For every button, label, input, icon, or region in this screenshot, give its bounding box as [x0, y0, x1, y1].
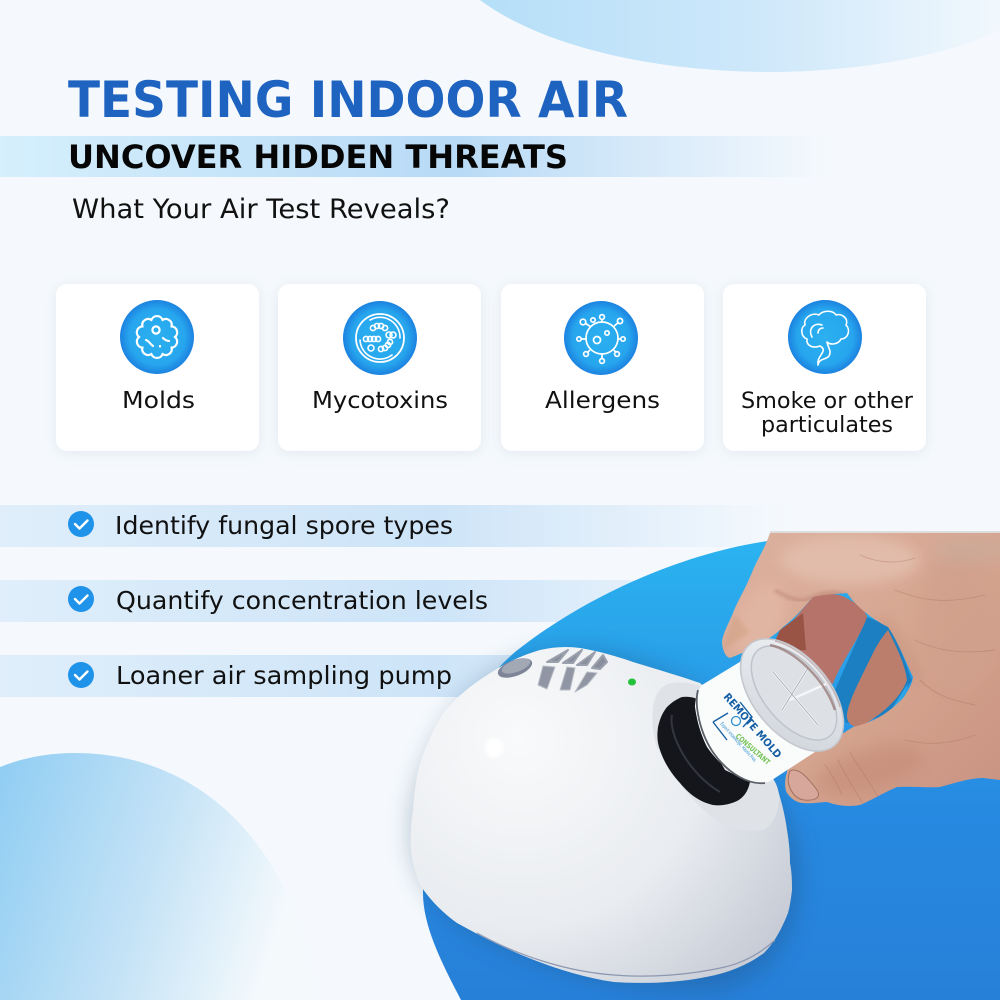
list item: spore types: Identify fungal spore types — [115, 511, 453, 540]
pump: lens bevel — [652, 683, 779, 831]
pump: green LED — [628, 678, 636, 686]
list item: spore types — [0, 505, 790, 547]
icon: petri dish — [343, 301, 417, 375]
cassette: logo: REMOTE MOLD — [721, 691, 784, 761]
list item: concentration: Quantify concentration levels — [116, 586, 488, 615]
photo: hand holding cassette over pump — [410, 531, 1000, 990]
icon: mold spore — [120, 300, 194, 374]
panel: mycotoxins — [278, 284, 481, 451]
pump shadow — [410, 650, 800, 990]
intro question: What Your Air Test Reveals? — [72, 194, 450, 225]
cassette — [695, 620, 864, 783]
pump: black intake — [657, 697, 750, 805]
list item: concentration — [0, 580, 790, 622]
panel: molds — [56, 284, 259, 451]
hand: palm, index and thumb — [722, 533, 1000, 806]
hand: thumbnail — [788, 770, 819, 800]
label: smoke: Smoke or other — [741, 388, 914, 414]
blue backdrop shape — [423, 540, 1000, 1000]
decorative blob: top right — [480, 0, 1000, 72]
hand: small highlight gap — [888, 683, 908, 715]
pump: base seam — [477, 933, 775, 976]
pump: intake highlight — [672, 715, 720, 792]
icon: smoke cloud — [788, 300, 862, 374]
hand: middle finger — [770, 613, 806, 652]
pump: vent grille — [538, 650, 607, 692]
label: smoke: particulates — [761, 412, 893, 438]
pump body — [411, 647, 792, 983]
label: smoke — [741, 388, 914, 438]
panel: allergens — [501, 284, 704, 451]
hand: ring finger — [770, 594, 867, 684]
panel: smoke — [723, 284, 926, 451]
hand: little finger — [847, 630, 907, 727]
label: allergens: Allergens — [545, 388, 660, 414]
dark blue gap between fingers — [835, 617, 912, 723]
cassette: clear lid — [720, 620, 864, 770]
pump: highlight — [485, 738, 503, 758]
list item: loaner pump: Loaner air sampling pump — [116, 661, 452, 690]
subtitle band: UNCOVER HIDDEN THREATS — [68, 138, 568, 176]
hand: shading and creases — [722, 536, 1000, 804]
subtitle band — [0, 136, 830, 177]
cassette: logo: Expert knowledge. Hassle Free. — [719, 721, 758, 764]
cassette: white label band — [695, 660, 815, 783]
label: molds: Molds — [122, 388, 195, 414]
list item: loaner pump — [0, 655, 790, 697]
hand: top edge line — [770, 531, 1000, 534]
cassette: logo: CONSULTANT — [734, 732, 773, 767]
icon: allergen particle — [564, 301, 638, 375]
decorative blob: bottom left — [0, 753, 316, 1000]
title: TESTING INDOOR AIR — [68, 71, 628, 129]
cassette: clear rim — [697, 690, 765, 783]
label: mycotoxins: Mycotoxins — [312, 388, 448, 414]
pump: power button — [495, 654, 535, 682]
